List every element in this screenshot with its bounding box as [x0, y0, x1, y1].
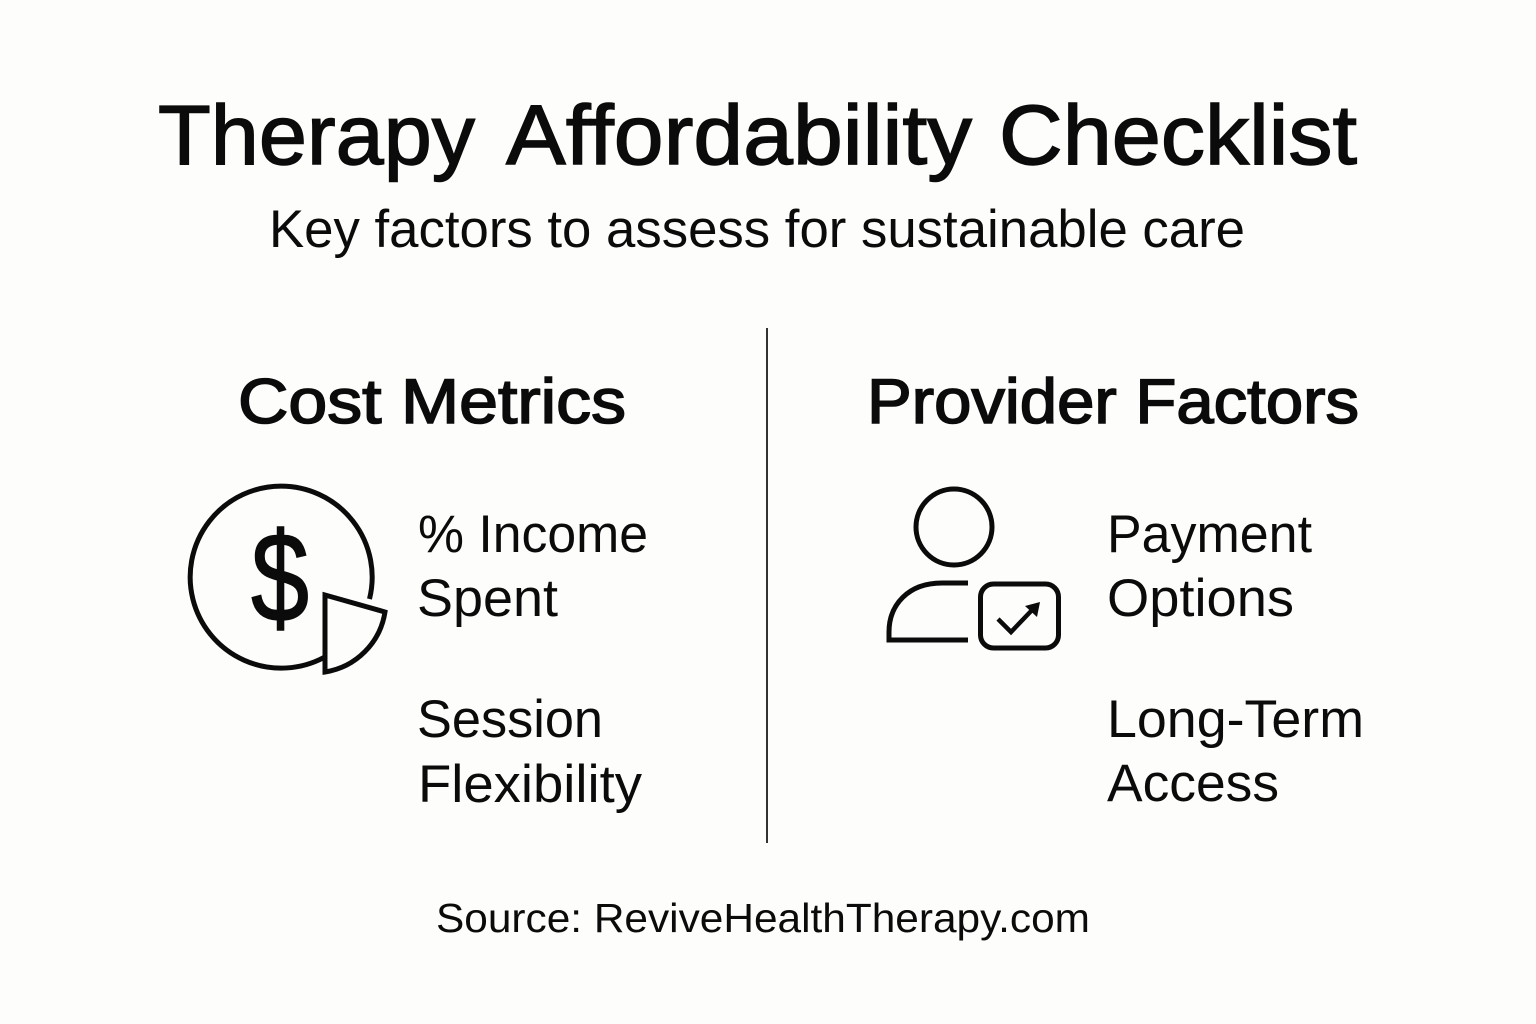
item: session flexibility: Session: [417, 690, 603, 749]
source: Source: ReviveHealthTherapy.com: [436, 895, 1090, 941]
icon: person with checkmark card: [889, 489, 1058, 648]
icon: dollar coin with pie wedge: $: [251, 506, 309, 648]
item: percent income spent: % Income: [418, 505, 648, 564]
heading: cost metrics: Cost Metrics: [238, 367, 626, 437]
item: session flexibility: [417, 690, 643, 814]
item: payment options: Options: [1107, 569, 1294, 628]
heading: provider factors: Provider Factors: [867, 367, 1359, 437]
item: long-term access: [1107, 690, 1364, 813]
panel: provider factors: [867, 367, 1364, 813]
item: percent income spent: Spent: [417, 569, 558, 628]
panel: cost metrics: [190, 367, 648, 814]
icon: dollar coin with pie wedge: [190, 486, 385, 672]
item: percent income spent: [417, 505, 648, 628]
title: Checklist: [999, 88, 1357, 182]
item: session flexibility: Flexibility: [418, 755, 643, 814]
item: payment options: Payment: [1107, 505, 1312, 564]
title: Therapy: [158, 88, 475, 182]
subtitle: Key factors to assess for sustainable care: [269, 200, 1245, 259]
item: payment options: [1107, 505, 1312, 628]
divider: [766, 328, 768, 843]
title: Affordability: [506, 88, 972, 182]
item: long-term access: Access: [1107, 754, 1279, 813]
item: long-term access: Long-Term: [1107, 690, 1364, 749]
